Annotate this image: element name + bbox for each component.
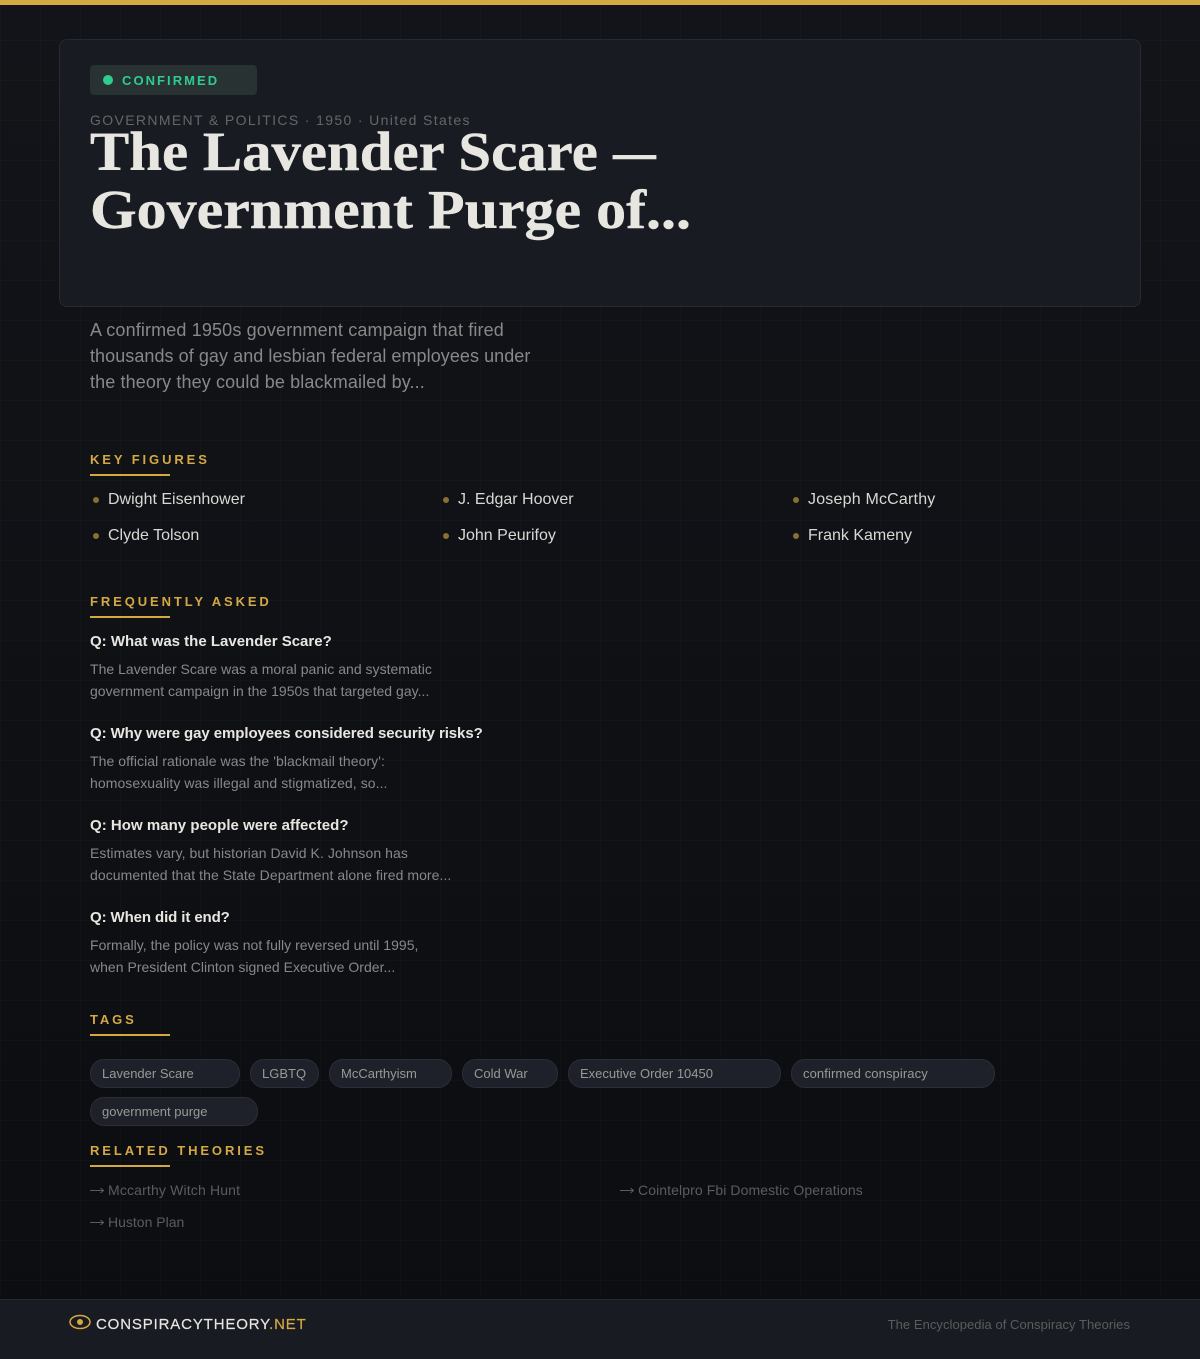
list: key figures: John Peurifoy: [458, 527, 556, 544]
faq 3: Estimates vary, but historian David K. Johnson has: [90, 845, 408, 861]
title: The Lavender Scare: [90, 121, 598, 182]
footer: [0, 1299, 1200, 1359]
tag list: McCarthyism: [341, 1066, 417, 1081]
related links: Cointelpro Fbi Domestic Operations: [638, 1182, 863, 1198]
tag list: Lavender Scare: [102, 1066, 194, 1081]
heading: tags: TAGS: [90, 1012, 137, 1027]
tag list: [90, 1059, 995, 1126]
faq 2: The official rationale was the 'blackmail theory':: [90, 753, 385, 769]
related links: Mccarthy Witch Hunt: [108, 1182, 240, 1198]
heading: frequently asked: FREQUENTLY ASKED: [90, 594, 272, 609]
list: key figures: Frank Kameny: [808, 527, 912, 544]
faq 2: Q: Why were gay employees considered security risks?: [90, 725, 483, 742]
faq 4: Q: When did it end?: [90, 909, 230, 926]
tag list: Executive Order 10450: [580, 1066, 713, 1081]
related links: [90, 1182, 863, 1230]
list: key figures: [93, 491, 936, 544]
faq 3: Q: How many people were affected?: [90, 817, 349, 834]
faq 4: when President Clinton signed Executive Order...: [90, 959, 395, 975]
tag list: confirmed conspiracy: [803, 1066, 928, 1081]
related links: Huston Plan: [108, 1214, 184, 1230]
faq 3: documented that the State Department alone fired more...: [90, 867, 451, 883]
faq 4: [90, 909, 418, 975]
list: key figures: J. Edgar Hoover: [458, 491, 574, 508]
faq 4: Formally, the policy was not fully reversed until 1995,: [90, 937, 418, 953]
badge: confirmed: [90, 65, 257, 95]
summary text: [90, 320, 530, 392]
tag list: government purge: [102, 1104, 208, 1119]
heading: key figures: KEY FIGURES: [90, 452, 210, 467]
panel: header card: [59, 39, 1141, 307]
faq 1: [90, 633, 432, 699]
icon: eye: [69, 1314, 91, 1330]
list: key figures: Joseph McCarthy: [808, 491, 936, 508]
faq 2: homosexuality was illegal and stigmatized, so...: [90, 775, 388, 791]
faq 1: The Lavender Scare was a moral panic and systematic: [90, 661, 432, 677]
tag list: LGBTQ: [262, 1066, 306, 1081]
faq 3: [90, 817, 451, 883]
summary text: A confirmed 1950s government campaign that fired: [90, 320, 504, 340]
faq 1: Q: What was the Lavender Scare?: [90, 633, 332, 650]
faq 1: government campaign in the 1950s that targeted gay...: [90, 683, 429, 699]
tag list: Cold War: [474, 1066, 528, 1081]
faq 2: [90, 725, 483, 791]
title: —: [613, 121, 656, 182]
category line: GOVERNMENT & POLITICS · 1950 · United States: [90, 112, 471, 128]
title: Government Purge of...: [90, 179, 691, 240]
summary text: thousands of gay and lesbian federal employees under: [90, 346, 530, 366]
list: key figures: Dwight Eisenhower: [108, 491, 245, 508]
badge: confirmed: CONFIRMED: [122, 73, 219, 88]
summary text: the theory they could be blackmailed by...: [90, 372, 425, 392]
list: key figures: Clyde Tolson: [108, 527, 199, 544]
footer tagline: The Encyclopedia of Conspiracy Theories: [888, 1317, 1130, 1332]
logo text: CONSPIRACYTHEORY.NET: [96, 1316, 307, 1333]
title: [90, 121, 691, 240]
heading: related theories: RELATED THEORIES: [90, 1143, 267, 1158]
